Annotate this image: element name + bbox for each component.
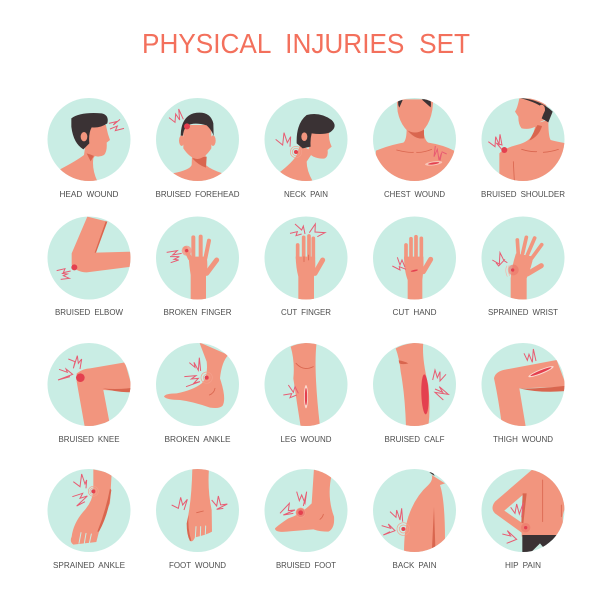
panel: head wound (48, 98, 130, 199)
panel: bruised calf (373, 342, 456, 444)
title: PHYSICAL INJURIES SET (142, 28, 470, 59)
panel: bruised elbow: BRUISED ELBOW (55, 307, 124, 317)
panel: leg wound (264, 342, 348, 444)
panel: bruised calf: BRUISED CALF (384, 434, 444, 444)
panel: back pain: BACK PAIN (392, 560, 436, 570)
panel: bruised foot: BRUISED FOOT (276, 560, 337, 570)
panel: leg wound: LEG WOUND (280, 434, 332, 444)
panel: chest wound (373, 98, 457, 199)
panel: foot wound: FOOT WOUND (169, 560, 226, 570)
panel: bruised foot (264, 468, 348, 570)
panel: bruised shoulder (481, 98, 567, 199)
panel: sprained ankle: SPRAINED ANKLE (53, 560, 125, 570)
panel: broken finger: BROKEN FINGER (164, 307, 232, 317)
panel: back pain (373, 469, 456, 570)
panel: thigh wound: THIGH WOUND (493, 434, 553, 444)
panel: bruised forehead (156, 98, 240, 199)
panel: head wound: HEAD WOUND (60, 189, 118, 199)
panel: sprained wrist: SPRAINED WRIST (488, 307, 559, 317)
panel: sprained ankle (48, 469, 130, 570)
panel: foot wound (156, 468, 239, 570)
panel: thigh wound (482, 343, 567, 444)
panel: broken finger (156, 216, 239, 317)
panel: bruised knee: BRUISED KNEE (58, 434, 120, 444)
panel: cut finger: CUT FINGER (281, 307, 331, 317)
panel: bruised knee (48, 343, 133, 444)
panel: chest wound: CHEST WOUND (384, 189, 445, 199)
panel: hip pain: HIP PAIN (505, 560, 541, 570)
panel: bruised forehead: BRUISED FOREHEAD (156, 189, 240, 199)
panel: bruised shoulder: BRUISED SHOULDER (481, 189, 565, 199)
panel: cut finger (264, 216, 348, 317)
panel: bruised elbow (48, 216, 132, 317)
panel: broken ankle: BROKEN ANKLE (164, 434, 231, 444)
panel: sprained wrist (482, 216, 564, 317)
panel: cut hand (373, 216, 456, 317)
panel: cut hand: CUT HAND (392, 307, 436, 317)
panel: broken ankle (156, 342, 239, 444)
panel: hip pain (482, 469, 567, 570)
panel: neck pain: NECK PAIN (284, 189, 328, 199)
panel: neck pain (264, 98, 348, 199)
